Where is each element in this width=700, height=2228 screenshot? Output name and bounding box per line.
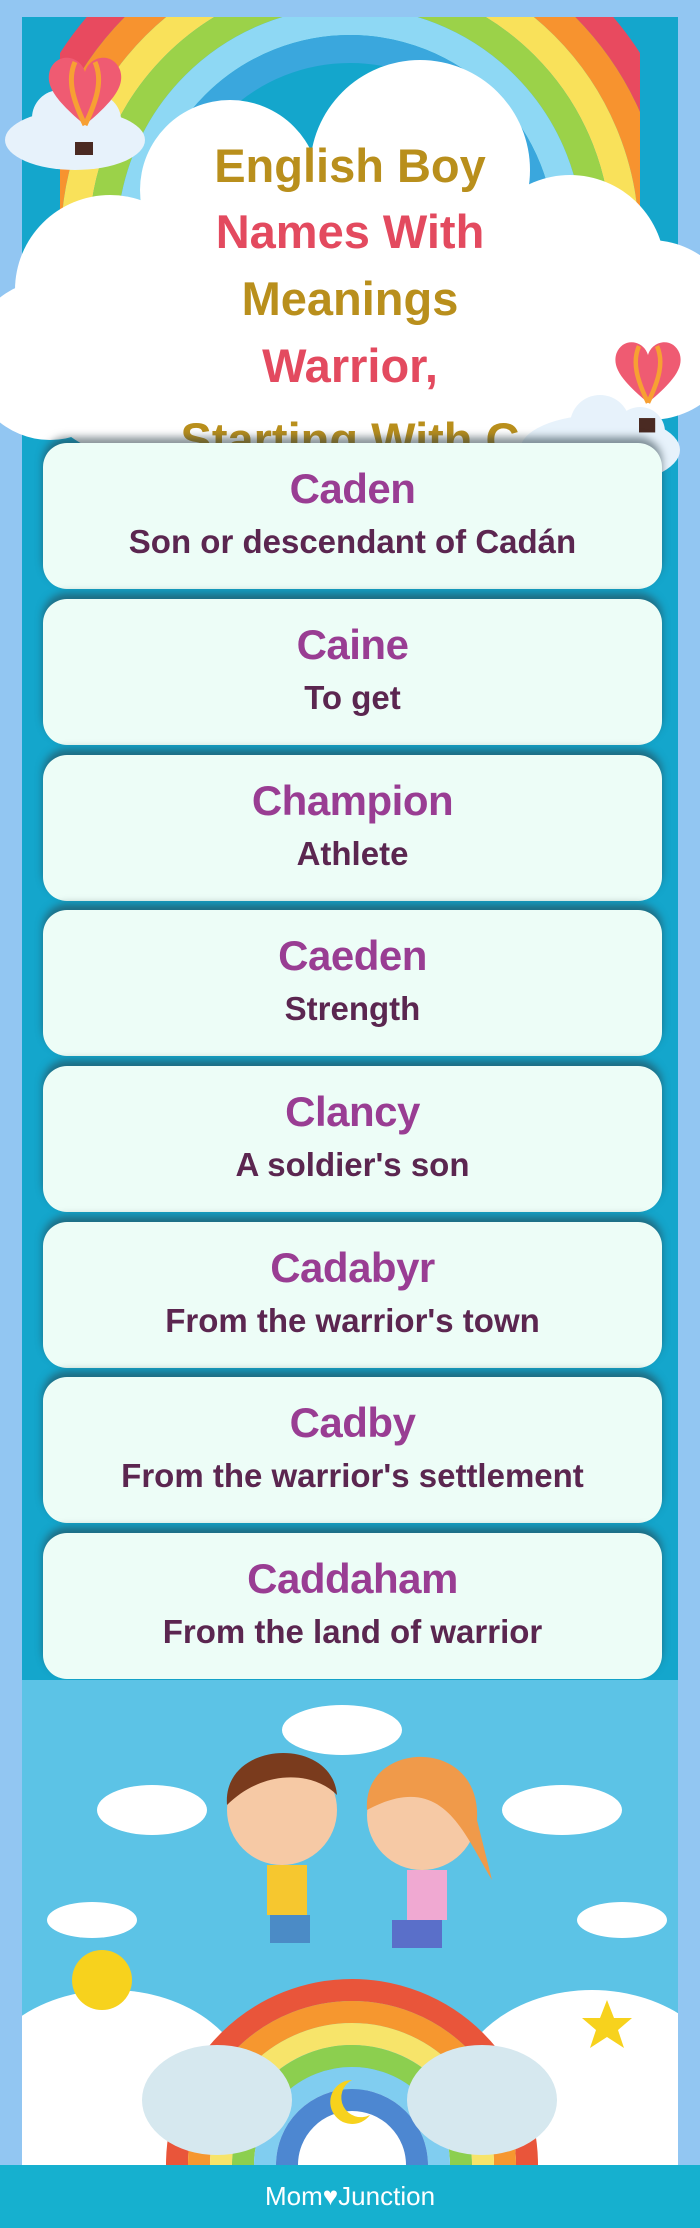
header illustration: rainbow and clouds [0, 17, 700, 472]
card: Champion [43, 755, 662, 901]
card: Clancy: A soldier's son [235, 1146, 470, 1183]
card: Cadby: Cadby [290, 1399, 415, 1446]
card: Caeden [43, 910, 662, 1056]
bottom illustration: kids on rainbow [22, 1680, 678, 2165]
card: Caine: To get [304, 679, 401, 716]
footer with logo [0, 2165, 700, 2228]
card: Clancy: Clancy [285, 1088, 420, 1135]
card: Caden: Son or descendant of Cadán [129, 523, 576, 560]
card: Caddaham: Caddaham [247, 1555, 458, 1602]
card: Caden: Caden [290, 465, 415, 512]
title [180, 139, 519, 466]
title: Names With [216, 205, 484, 258]
icon: hot air balloon left [48, 58, 122, 155]
card: Caeden: Strength [285, 990, 420, 1027]
card: Cadby: From the warrior's settlement [121, 1457, 584, 1494]
logo: MomJunction: Mom♥Junction [265, 2181, 435, 2211]
card: Cadabyr [43, 1222, 662, 1368]
card: Cadabyr: From the warrior's town [165, 1302, 540, 1339]
title: Meanings [242, 272, 458, 325]
icon: hot air balloon right [615, 342, 681, 432]
card: Caine: Caine [297, 621, 408, 668]
big cloud [0, 60, 700, 480]
title: English Boy [214, 139, 486, 192]
card: Caddaham: From the land of warrior [163, 1613, 542, 1650]
card: Champion: Athlete [297, 835, 408, 872]
card: Caine [43, 599, 662, 745]
card: Cadabyr: Cadabyr [270, 1244, 435, 1291]
small clouds [5, 90, 680, 485]
card: Caddaham [43, 1533, 662, 1679]
card: Champion: Champion [252, 777, 453, 824]
card: Cadby [43, 1377, 662, 1523]
card: Caden [43, 443, 662, 589]
title: Starting With C [180, 413, 519, 466]
card: Clancy [43, 1066, 662, 1212]
title: Warrior, [262, 339, 438, 392]
card: Caeden: Caeden [278, 932, 427, 979]
